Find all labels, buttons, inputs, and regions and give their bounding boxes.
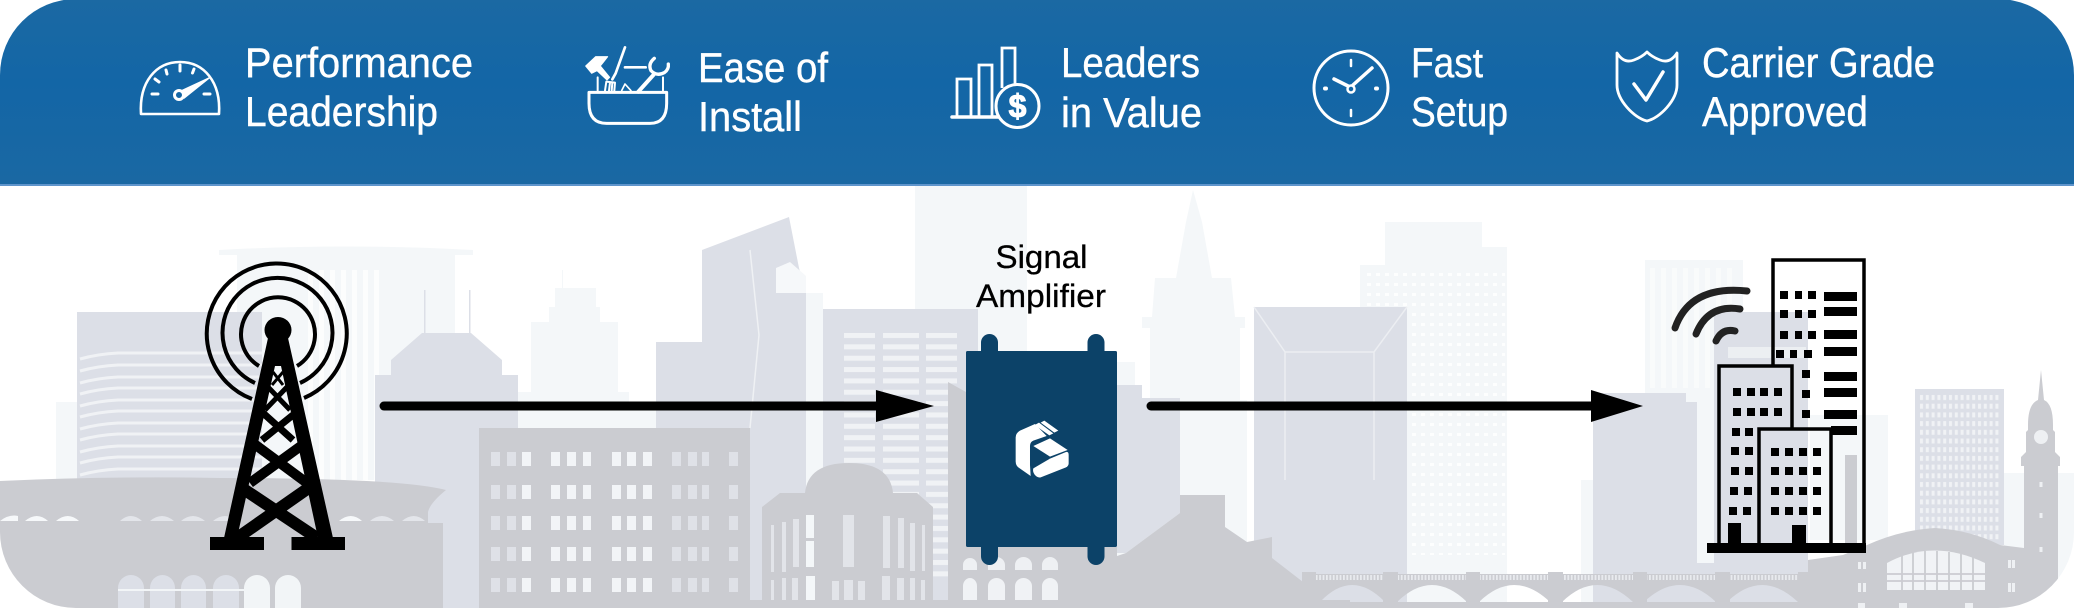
feature label: Ease of Install: Ease of xyxy=(698,44,828,91)
skyline: dark foreground office block xyxy=(479,428,750,608)
feature label: Leaders in Value: in Value xyxy=(1061,89,1202,136)
feature label: Carrier Grade Approved xyxy=(1702,39,1935,135)
panel: blue feature header xyxy=(0,0,2074,186)
icon: bar chart with dollar coin: $ xyxy=(1009,88,1027,124)
arrow: tower to amplifier xyxy=(384,390,934,422)
skyline: bridge xyxy=(1302,572,1810,608)
arrow: amplifier to building xyxy=(1151,390,1643,422)
feature label: Performance Leadership: Leadership xyxy=(245,88,438,135)
feature label: Ease of Install: Install xyxy=(698,93,802,140)
icon: bar chart with dollar coin xyxy=(952,48,1039,128)
feature label: Leaders in Value: Leaders xyxy=(1061,39,1200,86)
feature label: Ease of Install xyxy=(700,51,828,132)
skyline: domed building xyxy=(762,463,933,604)
icon: toolbox with tools xyxy=(586,47,668,123)
icon: shield with check xyxy=(1617,52,1677,121)
skyline: low roofs behind amplifier xyxy=(750,382,1350,608)
feature label: Fast Setup: Setup xyxy=(1411,88,1508,135)
label: Signal Amplifier: Signal xyxy=(996,239,1088,275)
icon: speedometer gauge xyxy=(141,62,219,114)
feature label: Performance Leadership: Performance xyxy=(245,39,473,86)
skyline: light far buildings xyxy=(56,186,2074,608)
label: Signal Amplifier xyxy=(976,239,1106,314)
wifi signal arcs xyxy=(1675,290,1747,341)
front building xyxy=(1759,429,1831,546)
window details on mid-tone buildings xyxy=(80,250,1999,577)
feature label: Leaders in Value xyxy=(1063,46,1200,128)
icon: signal amplifier unit xyxy=(966,334,1117,565)
icon: clock xyxy=(1314,51,1388,125)
feature label: Performance Leadership xyxy=(245,39,473,135)
feature label: Fast Setup: Fast xyxy=(1411,39,1483,86)
skyline: mid-tone buildings xyxy=(77,217,2004,608)
skyline: railway station xyxy=(1808,528,2024,608)
mid building xyxy=(1719,366,1792,546)
icon: amplifier logo xyxy=(1016,421,1069,477)
skyline: chimney xyxy=(1845,455,1857,545)
icon: cell tower broadcasting xyxy=(207,264,347,550)
tall tower xyxy=(1773,260,1864,545)
feature label: Carrier Grade Approved: Approved xyxy=(1702,88,1868,135)
feature label: Carrier Grade Approved: Carrier Grade xyxy=(1702,39,1935,86)
label: Signal Amplifier: Amplifier xyxy=(976,278,1106,314)
skyline: dark foreground stadium xyxy=(0,477,446,608)
icon: office buildings with wifi xyxy=(1675,260,1866,553)
feature label: Fast Setup xyxy=(1412,48,1507,135)
skyline: clock tower xyxy=(2021,370,2060,608)
